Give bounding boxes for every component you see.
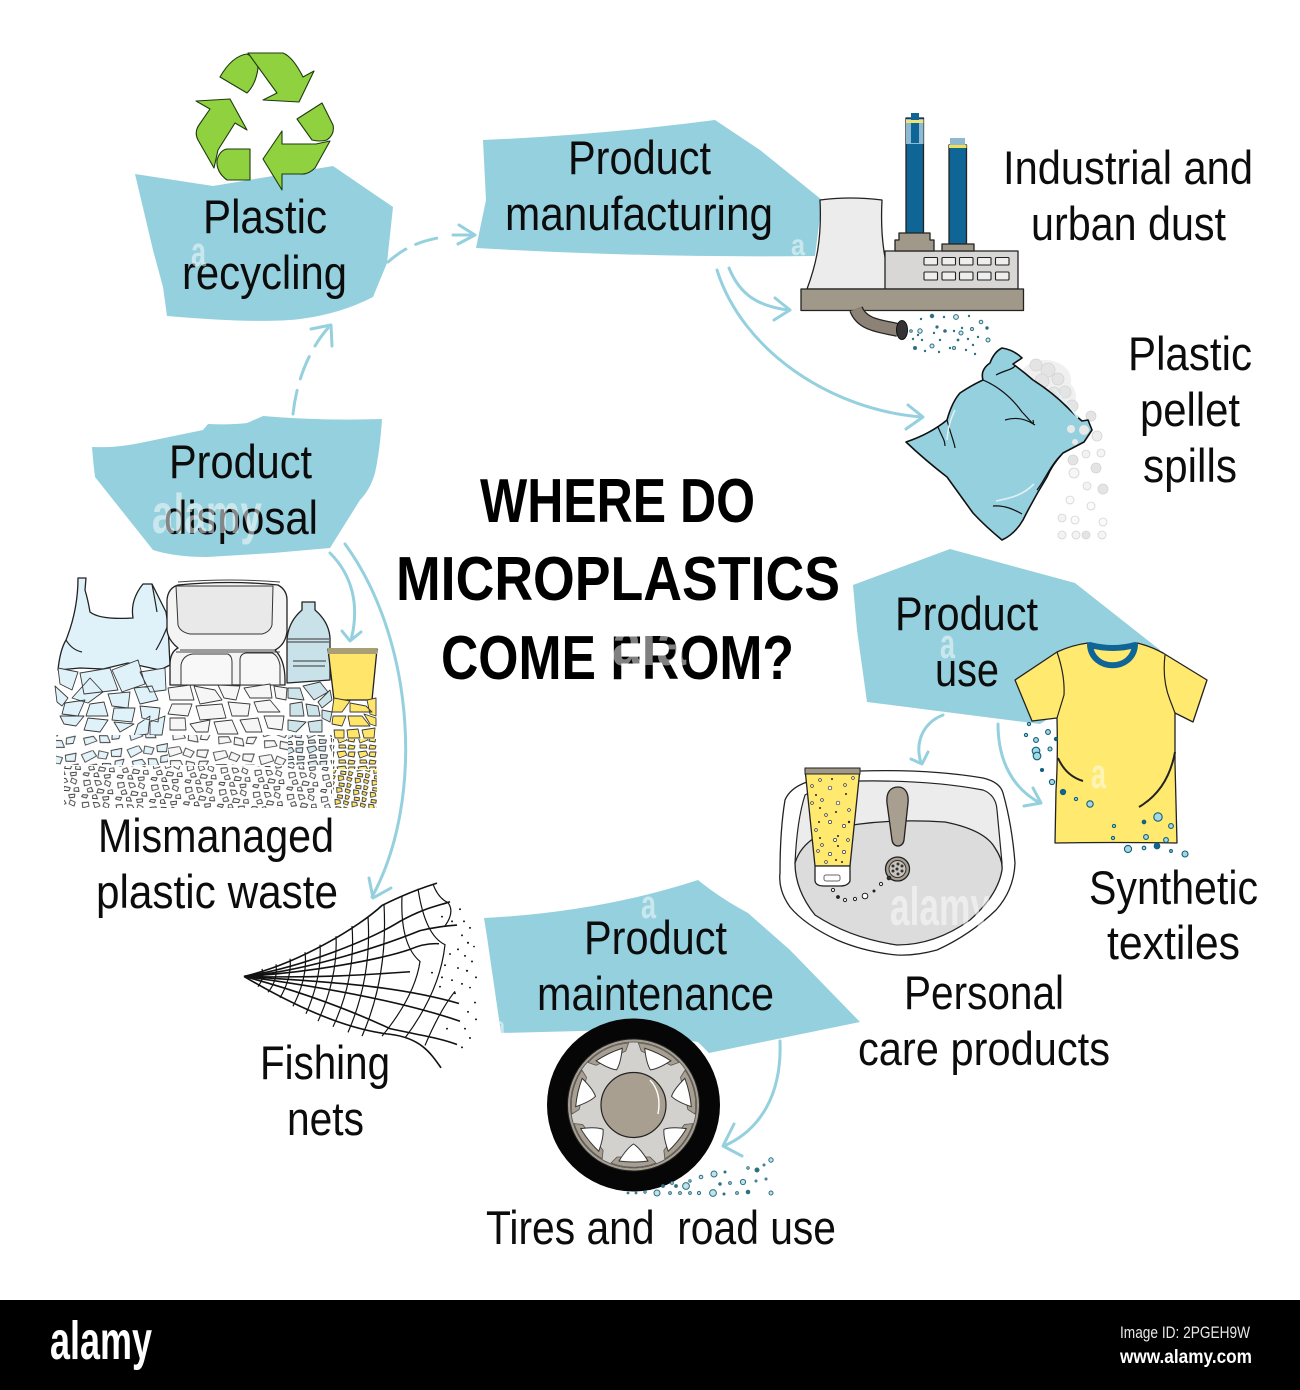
panel: product maintenance: Product	[584, 911, 727, 964]
arrow: product use to sink	[911, 715, 943, 764]
panel: product manufacturing: manufacturing	[505, 187, 773, 240]
panel: product maintenance	[484, 880, 860, 1053]
icon: t-shirt: a	[1091, 750, 1106, 797]
icon: t-shirt	[1015, 643, 1207, 857]
shirt creases	[1058, 752, 1175, 807]
waste pipe	[856, 309, 898, 330]
tube	[328, 649, 377, 700]
factory particles	[912, 314, 989, 355]
panel: product use	[853, 549, 1160, 724]
net fragments	[431, 908, 477, 1048]
title: COME FROM?	[441, 624, 794, 693]
panel: product maintenance: maintenance	[537, 967, 774, 1020]
label: mismanaged plastic waste	[96, 809, 338, 918]
faucet	[887, 787, 908, 846]
factory base	[801, 289, 1024, 310]
label: tires and road use: Tires and road use	[486, 1201, 836, 1254]
icon: bathroom sink	[780, 771, 1015, 955]
collar	[1090, 645, 1135, 665]
net strands	[244, 883, 460, 1068]
arrow: manufacturing to pellet bag	[717, 270, 923, 429]
net cross ribs	[258, 884, 455, 1045]
plastic bag	[58, 578, 170, 670]
waste fragments: large	[55, 660, 166, 736]
label: fishing nets: nets	[287, 1092, 364, 1145]
label: mismanaged plastic waste: plastic waste	[96, 865, 338, 918]
panel: product use: use	[935, 643, 999, 696]
food container	[167, 582, 287, 685]
panel: plastic recycling: recycling	[182, 246, 347, 299]
wheel hub	[601, 1072, 666, 1138]
factory particles outlined	[910, 315, 990, 350]
title: WHERE DO	[480, 467, 755, 536]
footer bar: Image ID: 2PGEH9W	[1120, 1323, 1250, 1342]
panel: product use: a	[940, 620, 955, 667]
label: plastic pellet spills: pellet	[1140, 383, 1240, 436]
title: MICROPLASTICS	[396, 545, 840, 614]
sink droplets	[831, 876, 891, 902]
panel: plastic recycling: a	[191, 228, 206, 275]
panel: product disposal: alamy	[152, 482, 262, 545]
waste fragments: medium	[56, 735, 168, 765]
icon: personal care tube	[805, 768, 860, 886]
panel: product disposal: disposal	[164, 491, 318, 544]
label: synthetic textiles	[1089, 861, 1258, 969]
title: ala	[612, 607, 686, 679]
tire particles	[627, 1158, 773, 1196]
arrow: product use to shirt	[998, 724, 1041, 806]
label: mismanaged plastic waste: Mismanaged	[98, 809, 334, 862]
label: industrial and urban dust	[1003, 141, 1253, 250]
panel: product manufacturing	[476, 120, 822, 262]
icon: bathroom sink: alamy	[890, 877, 990, 937]
arrow: disposal to plastic waste	[330, 553, 361, 641]
panel: product disposal	[92, 416, 382, 557]
arrow: recycling to manufacturing (dashed)	[388, 225, 475, 262]
sink basin	[795, 821, 1002, 945]
panel: product use: Product	[895, 587, 1038, 640]
label: personal care products: care products	[858, 1022, 1110, 1075]
bottle	[287, 602, 330, 683]
footer bar	[0, 1300, 1300, 1390]
label: plastic pellet spills: spills	[1143, 439, 1237, 492]
label: plastic pellet spills: Plastic	[1128, 327, 1252, 380]
icon: car tire	[547, 1018, 720, 1192]
panel: product manufacturing: a	[791, 229, 805, 262]
footer bar: www.alamy.com	[1119, 1347, 1252, 1368]
left chimney	[895, 113, 934, 251]
icon: mismanaged plastic waste	[55, 578, 377, 808]
label: fishing nets: Fishing	[260, 1036, 390, 1089]
cooling tower	[807, 198, 894, 289]
arrow: maintenance to tire	[723, 1041, 780, 1156]
label: fishing nets	[260, 1036, 390, 1145]
factory windows	[924, 258, 1009, 280]
wheel spoke openings	[568, 1039, 699, 1167]
pellets spilling from bag	[1019, 359, 1108, 539]
factory building	[885, 251, 1018, 289]
icon: pellet bag	[906, 348, 1092, 540]
label: industrial and urban dust: urban dust	[1031, 197, 1226, 250]
shirt microfibres	[1024, 722, 1188, 857]
panel: product maintenance: a	[494, 1011, 505, 1041]
panel: plastic recycling	[135, 166, 393, 321]
drain	[886, 857, 910, 881]
right chimney	[942, 138, 974, 251]
waste fragments: small	[64, 766, 332, 808]
label: synthetic textiles: textiles	[1107, 916, 1240, 969]
label: industrial and urban dust: Industrial and	[1003, 141, 1253, 194]
panel: product disposal: Product	[169, 435, 312, 488]
icon: factory	[801, 113, 1024, 340]
label: personal care products: Personal	[904, 966, 1064, 1019]
icon: recycling symbol	[196, 53, 333, 190]
arrow: manufacturing to factory	[729, 268, 790, 320]
label: plastic pellet spills	[1128, 327, 1252, 492]
arrow: disposal to recycling (dashed)	[293, 325, 332, 414]
panel: product manufacturing: Product	[568, 131, 711, 184]
label: personal care products	[858, 966, 1110, 1075]
panel: plastic recycling: Plastic	[203, 190, 327, 243]
bag folds	[938, 366, 1063, 514]
icon: fishing net	[244, 883, 477, 1068]
footer bar: alamy	[50, 1311, 152, 1371]
arrow: disposal to fishing nets	[345, 544, 406, 898]
tube beads	[811, 777, 854, 863]
title	[396, 467, 840, 693]
panel: product maintenance: a	[641, 883, 657, 927]
label: synthetic textiles: Synthetic	[1089, 861, 1258, 914]
